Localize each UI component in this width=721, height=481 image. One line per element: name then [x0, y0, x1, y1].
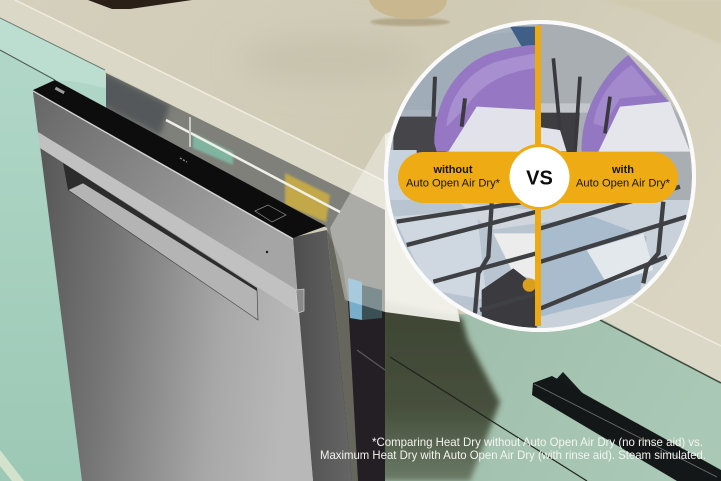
- VS badge: [506, 144, 572, 210]
- black cabinet handle: [532, 372, 721, 481]
- right photo: with: [538, 24, 692, 328]
- door edge reflection: [327, 230, 358, 481]
- door clip: [296, 289, 304, 313]
- dishwasher stainless front: [33, 90, 313, 481]
- dishwasher interior seen through open door: [100, 70, 385, 481]
- dark tray on the counter: [88, 0, 192, 9]
- footnote: Maximum Heat Dry with Auto Open Air Dry (with rinse aid). Steam simulated.: [320, 448, 706, 462]
- black control strip: [33, 80, 326, 239]
- mint cabinet right: [380, 300, 721, 481]
- indicator dot: [266, 251, 268, 253]
- footnote: *Comparing Heat Dry without Auto Open Air Dry (no rinse aid) vs.: [372, 435, 703, 449]
- label: with: with: [611, 164, 634, 176]
- label: with subtitle: Auto Open Air Dry*: [576, 178, 671, 190]
- appliance in top right corner: [600, 0, 721, 44]
- mint cabinet left: [0, 18, 107, 481]
- handle band: [38, 132, 298, 313]
- yellow divider: [535, 26, 541, 326]
- left photo: without: [388, 24, 538, 328]
- footnote: [320, 435, 706, 462]
- VS badge: VS: [526, 168, 553, 190]
- handle lip: [68, 183, 258, 320]
- label: without: without: [432, 164, 473, 176]
- control panel face: [33, 92, 297, 290]
- magnifier cone: [330, 132, 460, 322]
- dishwasher side panel: [290, 230, 352, 481]
- comparison circle: [380, 10, 700, 340]
- handle recess: [63, 163, 257, 291]
- bowl on the counter: [369, 0, 450, 26]
- label: without subtitle: Auto Open Air Dry*: [406, 178, 501, 190]
- yellow label bar: [398, 152, 678, 203]
